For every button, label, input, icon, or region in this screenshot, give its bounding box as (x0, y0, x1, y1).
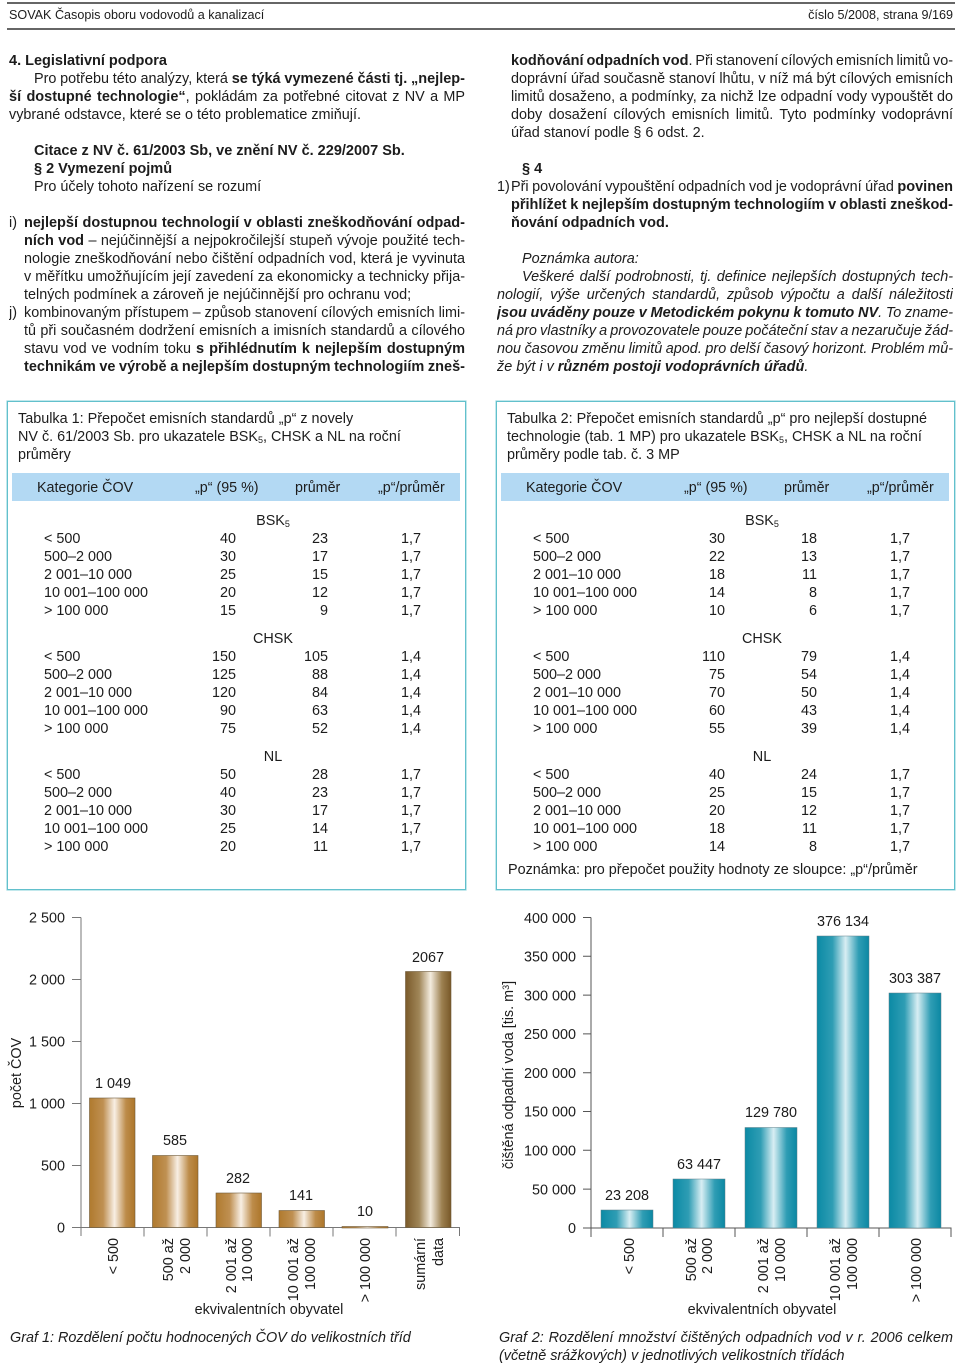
chart 2 y tick labels: 250 000 (524, 1027, 576, 1043)
table 1 header band: „p“/průměr (378, 480, 445, 496)
text column: left: v měřítku umožňujícím její zavedení za ekonomicky a technicky přija- (24, 269, 465, 285)
text column: left (9, 53, 465, 375)
text column: right: že být i v různém postoji vodoprávních úřadů. (497, 359, 808, 375)
table 1 data: 75 (220, 721, 236, 737)
chart 1 value labels: 282 (226, 1171, 250, 1187)
chart 2 category labels: > 100 000 (909, 1238, 925, 1302)
table 2 data: 60 (709, 703, 725, 719)
chart 2 category labels (622, 1238, 925, 1302)
table 2 data: 18 (801, 531, 817, 547)
chart 2 category labels: 2 000 (700, 1238, 716, 1274)
table 1 header band: „p“ (95 %) (195, 480, 259, 496)
text column: right: Poznámka autora: (522, 251, 639, 267)
chart 1 category labels: 10 000 (240, 1238, 256, 1282)
text column: left: tů při současném dodržení emisních a imisních standardů a cílového (24, 323, 465, 339)
table 1 data: 2 001–10 000 (44, 567, 132, 583)
text column: right: § 4 (522, 161, 542, 177)
chart 2 x axis title: ekvivalentních obyvatel (688, 1302, 836, 1318)
page header (7, 2, 955, 30)
text column: right: limitů dosaženo, a podmínky, za nichž lze odpadní vody vypouštět do (511, 89, 953, 105)
text column: right: přihlížet k nejlepším dostupným technologiím v oblasti zneškod- (511, 197, 953, 213)
table 1 data: 17 (312, 549, 328, 565)
table 1 data: 14 (312, 821, 328, 837)
table 2 data: 500–2 000 (533, 549, 601, 565)
table 1 data: 1,7 (401, 549, 421, 565)
table 2 data: 13 (801, 549, 817, 565)
table 2 data: 14 (709, 585, 725, 601)
chart 1 category labels (106, 1238, 447, 1302)
table 1 data: BSK5 (256, 513, 290, 529)
table 2 data: 110 (702, 649, 725, 665)
table 1 data: 10 001–100 000 (44, 703, 148, 719)
table 2 data: 1,7 (890, 603, 910, 619)
table 2 data: 1,7 (890, 785, 910, 801)
table 2 data: 10 (709, 603, 725, 619)
table 1 data (44, 513, 421, 855)
table 1 data: 2 001–10 000 (44, 685, 132, 701)
table 1 data: 1,4 (401, 649, 421, 665)
table 2 data: 20 (709, 803, 725, 819)
table 2 header band: „p“ (95 %) (684, 480, 748, 496)
table 1 data: 105 (304, 649, 328, 665)
text column: right: 1) (497, 179, 510, 195)
text column: left: telných podmínek a zároveň je nejúčinnější pro ochranu vod; (24, 287, 411, 303)
table 2 data: 11 (802, 567, 817, 583)
table 1 data: 500–2 000 (44, 785, 112, 801)
text column: left: Pro potřebu této analýzy, která se týká vymezené části tj. „nejlep- (34, 71, 465, 87)
table 2 data: > 100 000 (533, 839, 597, 855)
table 2 data: 500–2 000 (533, 785, 601, 801)
table 2 data: 1,7 (890, 839, 910, 855)
table 2 data: 50 (801, 685, 817, 701)
table 1 data: < 500 (44, 767, 80, 783)
chart 2 category labels: 100 000 (845, 1238, 861, 1290)
table 2 data: 2 001–10 000 (533, 803, 621, 819)
table 2 data: 18 (709, 821, 725, 837)
panel: table 2 (496, 401, 955, 890)
page header: číslo 5/2008, strana 9/169 (808, 8, 953, 22)
table 2 data: > 100 000 (533, 603, 597, 619)
table 2 data: 30 (709, 531, 725, 547)
chart 1 value labels: 141 (289, 1188, 313, 1204)
text column: right: doby dosažení cílových emisních limitů. Tyto podmínky vodoprávní (511, 107, 953, 123)
table 1 data: 30 (220, 549, 236, 565)
table 2 data: 1,4 (890, 667, 910, 683)
chart 1 category labels: 2 000 (178, 1238, 194, 1274)
chart 1 y tick labels: 2 500 (29, 910, 65, 926)
chart 2 y tick labels: 200 000 (524, 1066, 576, 1082)
table 1 data: 40 (220, 785, 236, 801)
chart 1: number of plants (8, 910, 460, 1318)
text column: right: nologií, výše určených standardů, způsob výpočtu a další náležitosti (497, 287, 953, 303)
text column: left: 4. Legislativní podpora (9, 53, 167, 69)
table 2 data: 15 (801, 785, 817, 801)
table 1 data: CHSK (253, 631, 293, 647)
table 2 data: 39 (801, 721, 817, 737)
table 2 data: 70 (709, 685, 725, 701)
chart 2 y axis title: čištěná odpadní voda [tis. m (501, 990, 517, 1169)
table 1 header band (12, 473, 460, 501)
table 1 data: > 100 000 (44, 721, 108, 737)
table 2 data: 18 (709, 567, 725, 583)
table 1 data: > 100 000 (44, 603, 108, 619)
table 1 data: 500–2 000 (44, 549, 112, 565)
text column: left: Citace z NV č. 61/2003 Sb, ve znění NV č. 229/2007 Sb. (34, 143, 405, 159)
chart 2 category labels: 10 000 (773, 1238, 789, 1282)
table 1 data: 17 (312, 803, 328, 819)
text column: right: jsou uváděny pouze v Metodickém pokynu k tomuto NV. To zname- (497, 305, 953, 321)
table 2 note: Poznámka: pro přepočet použity hodnoty ze sloupce: „p“/průměr (508, 862, 918, 878)
chart 1 y tick labels: 1 000 (29, 1096, 65, 1112)
table 2 data: < 500 (533, 767, 569, 783)
chart 2: treated wastewater (501, 911, 951, 1318)
table 1 data: 120 (212, 685, 236, 701)
table 1 data: 23 (312, 531, 328, 547)
chart 2 value labels (605, 914, 941, 1204)
chart 1 category labels: 500 až (161, 1238, 177, 1281)
chart 1 value labels (95, 950, 444, 1220)
table 2 data: 1,4 (890, 703, 910, 719)
table 1 data: 1,4 (401, 721, 421, 737)
chart 1 axes (72, 918, 460, 1236)
chart 2 bars (601, 936, 941, 1228)
chart 1 value labels: 1 049 (95, 1076, 131, 1092)
text column: left: i) (9, 215, 17, 231)
table 1 data: 1,4 (401, 667, 421, 683)
table 1 data: 23 (312, 785, 328, 801)
table 2 header band: průměr (784, 480, 829, 496)
chart 2 y tick labels: 100 000 (524, 1144, 576, 1160)
table 2 data: 1,7 (890, 567, 910, 583)
table 1 data: 9 (320, 603, 328, 619)
text column: left: Pro účely tohoto nařízení se rozumí (34, 179, 261, 195)
table 2 data: 12 (801, 803, 817, 819)
table 1 data: 15 (220, 603, 236, 619)
text column: left: § 2 Vymezení pojmů (34, 161, 172, 177)
table 1 data: 1,7 (401, 531, 421, 547)
table 1 header band: průměr (295, 480, 340, 496)
text column: left: nejlepší dostupnou technologií v oblasti zneškodňování odpad- (24, 215, 465, 231)
chart 1 y tick labels: 2 000 (29, 972, 65, 988)
table 2 data: CHSK (742, 631, 782, 647)
table 1 data: 84 (312, 685, 328, 701)
table 1 data: 1,7 (401, 839, 421, 855)
table 2 data: 2 001–10 000 (533, 685, 621, 701)
table 1 data: 28 (312, 767, 328, 783)
chart 1 x axis title: ekvivalentních obyvatel (195, 1302, 343, 1318)
table 2 data: 11 (802, 821, 817, 837)
table 2 data: 10 001–100 000 (533, 585, 637, 601)
chart 1 bars (90, 972, 451, 1228)
text column: left: ší dostupné technologie“, pokládám za potřebné citovat z NV a MP (9, 89, 465, 105)
table 2 header band: „p“/průměr (867, 480, 934, 496)
table 2 data: 6 (809, 603, 817, 619)
table 1 data: 25 (220, 821, 236, 837)
table 1 data: 63 (312, 703, 328, 719)
table 2 data: 8 (809, 585, 817, 601)
table 1 data: 20 (220, 585, 236, 601)
table 2 title (507, 411, 927, 463)
table 1 data: 20 (220, 839, 236, 855)
chart 1 category labels: < 500 (106, 1238, 122, 1274)
table 2 data: 1,7 (890, 767, 910, 783)
text column: right: nou časovou změnu limitů apod. pro delší časový horizont. Problém mů- (497, 341, 953, 357)
chart 1 category labels: sumární (413, 1238, 429, 1290)
text column: right (497, 53, 953, 375)
caption: graph 2: Graf 2: Rozdělení množství čištěných odpadních vod v r. 2006 celkem (499, 1330, 953, 1346)
chart 2 category labels: 500 až (684, 1238, 700, 1281)
table 2 data: 2 001–10 000 (533, 567, 621, 583)
table 1 data: 1,7 (401, 803, 421, 819)
table 1 data: 1,7 (401, 767, 421, 783)
table 1 data: 15 (312, 567, 328, 583)
table 2 data: < 500 (533, 531, 569, 547)
text column: left: stavu vod ve vodním toku s přihlédnutím k nejlepším dostupným (24, 341, 465, 357)
table 1 data: 1,7 (401, 567, 421, 583)
text column: right: doprávní úřad současně stanoví lhůtu, v níž má být cílových emisních (511, 71, 953, 87)
table 1 data: 1,4 (401, 703, 421, 719)
table 2 data: 1,7 (890, 821, 910, 837)
chart 2 y tick labels: 50 000 (532, 1182, 576, 1198)
table 2 data: 55 (709, 721, 725, 737)
table 2 data (533, 513, 910, 855)
table 1 data: 12 (312, 585, 328, 601)
table 2 data: 1,7 (890, 549, 910, 565)
table 1 data: 500–2 000 (44, 667, 112, 683)
table 2 data: 1,4 (890, 721, 910, 737)
table 2 data: 1,4 (890, 649, 910, 665)
chart 2 value labels: 63 447 (677, 1157, 721, 1173)
chart 2 y tick labels: 0 (568, 1221, 576, 1237)
table 2 data: < 500 (533, 649, 569, 665)
table 2 header band (501, 473, 949, 501)
chart 1 category labels: 2 001 až (224, 1238, 240, 1293)
table 2 data: 10 001–100 000 (533, 703, 637, 719)
chart 1 y tick labels: 500 (41, 1158, 65, 1174)
chart 2 value labels: 303 387 (889, 971, 941, 987)
table 2 data: 24 (801, 767, 817, 783)
text column: right: Při povolování vypouštění odpadních vod je vodoprávní úřad povinen (511, 179, 953, 195)
table 1 data: 1,7 (401, 785, 421, 801)
table 1 data: 1,4 (401, 685, 421, 701)
chart 1 value labels: 10 (357, 1204, 373, 1220)
chart 1 category labels: > 100 000 (358, 1238, 374, 1302)
text column: left: ních vod – nejúčinnější a nejpokročilejší stupeň vývoje použité tech- (24, 233, 465, 249)
chart 2 category labels: 10 001 až (828, 1238, 844, 1301)
table 2 data: 1,4 (890, 685, 910, 701)
chart 2 value labels: 23 208 (605, 1188, 649, 1204)
table 1 data: 2 001–10 000 (44, 803, 132, 819)
chart 2 y tick labels: 350 000 (524, 950, 576, 966)
table 1 data: 150 (212, 649, 236, 665)
table 1 data: 1,7 (401, 603, 421, 619)
table 2 data: NL (753, 749, 771, 765)
chart 1 y tick labels (29, 910, 65, 1236)
text column: left: technikám ve výrobě a nejlepším dostupným technologiím zneš- (24, 359, 465, 375)
caption: graph 2 (499, 1330, 953, 1364)
text column: right: ňování odpadních vod. (511, 215, 669, 231)
table 1 data: 90 (220, 703, 236, 719)
text column: left: vybrané odstavce, které se o této problematice zmiňují. (9, 107, 361, 123)
table 2 data: 43 (801, 703, 817, 719)
chart 1 category labels: data (431, 1238, 447, 1266)
table 2 data: 75 (709, 667, 725, 683)
text column: right: ná pro vlastníky a provozovatele pouze počáteční stav a nezaručuje žád- (497, 323, 953, 339)
table 2 data: 25 (709, 785, 725, 801)
chart 2 value labels: 376 134 (817, 914, 869, 930)
table 1 data: 30 (220, 803, 236, 819)
text column: right: Veškeré další podrobnosti, tj. definice nejlepších dostupných tech- (522, 269, 953, 285)
text column: left: nologie zneškodňování nebo čištění odpadních vod, která je vyvinuta (24, 251, 465, 267)
table 1 data: 125 (212, 667, 236, 683)
table 1 data: 10 001–100 000 (44, 821, 148, 837)
table 2 data: 1,7 (890, 803, 910, 819)
chart 2 y tick labels (524, 911, 576, 1237)
table 2 title: průměry podle tab. č. 3 MP (507, 447, 680, 463)
page header: SOVAK Časopis oboru vodovodů a kanalizací (9, 8, 264, 22)
table 2 data: 8 (809, 839, 817, 855)
table 2 data: 1,7 (890, 531, 910, 547)
panel: table 1 (7, 401, 466, 890)
table 1 data: 1,7 (401, 585, 421, 601)
table 1 data: 88 (312, 667, 328, 683)
table 1 title: průměry (18, 447, 71, 463)
table 2 data: 10 001–100 000 (533, 821, 637, 837)
caption: graph 2: (včetně srážkových) v jednotlivých velikostních třídách (499, 1348, 845, 1364)
text column: right: kodňování odpadních vod. Při stanovení cílových emisních limitů vo- (511, 53, 953, 69)
chart 2 axes (583, 918, 951, 1237)
table 1 data: 50 (220, 767, 236, 783)
table 2 title: technologie (tab. 1 MP) pro ukazatele BSK5, CHSK a NL na roční (507, 429, 922, 445)
table 1 data: > 100 000 (44, 839, 108, 855)
table 2 data: BSK5 (745, 513, 779, 529)
text column: right: úřad stanoví podle § 6 odst. 2. (511, 125, 705, 141)
table 2 data: 22 (709, 549, 725, 565)
table 2 data: 54 (801, 667, 817, 683)
table 1 title: Tabulka 1: Přepočet emisních standardů „p“ z novely (18, 411, 353, 427)
table 1 title (18, 411, 401, 463)
table 1 data: 52 (312, 721, 328, 737)
chart 1 category labels: 100 000 (303, 1238, 319, 1290)
table 1 data: 10 001–100 000 (44, 585, 148, 601)
table 1 data: 1,7 (401, 821, 421, 837)
chart 2 y tick labels: 300 000 (524, 988, 576, 1004)
table 2 data: 79 (801, 649, 817, 665)
chart 2 value labels: 129 780 (745, 1105, 797, 1121)
caption: graph 1: Graf 1: Rozdělení počtu hodnocených ČOV do velikostních tříd (10, 1330, 411, 1346)
table 1 data: NL (264, 749, 282, 765)
table 2 data: 40 (709, 767, 725, 783)
chart 1 value labels: 2067 (412, 950, 444, 966)
table 2 data: 500–2 000 (533, 667, 601, 683)
chart 2 category labels: < 500 (622, 1238, 638, 1274)
chart 1 y axis title: počet ČOV (8, 1037, 25, 1108)
table 2 header band: Kategorie ČOV (526, 480, 622, 496)
chart 2 y tick labels: 150 000 (524, 1104, 576, 1120)
chart 2 category labels: 2 001 až (756, 1238, 772, 1293)
table 2 data: 1,7 (890, 585, 910, 601)
table 1 data: 40 (220, 531, 236, 547)
chart 1 value labels: 585 (163, 1133, 187, 1149)
table 2 title: Tabulka 2: Přepočet emisních standardů „p“ pro nejlepší dostupné (507, 411, 927, 427)
table 1 data: 25 (220, 567, 236, 583)
chart 2 y axis title: ] (501, 981, 517, 985)
table 2 data: 14 (709, 839, 725, 855)
chart 2 y axis title: 3 (501, 985, 511, 990)
table 1 data: < 500 (44, 531, 80, 547)
chart 1 y tick labels: 1 500 (29, 1034, 65, 1050)
chart 2 y tick labels: 400 000 (524, 911, 576, 927)
table 2 data: > 100 000 (533, 721, 597, 737)
table 1 data: 11 (313, 839, 328, 855)
text column: left: kombinovaným přístupem – způsob stanovení cílových emisních limi- (24, 305, 465, 321)
table 1 data: < 500 (44, 649, 80, 665)
chart 1 category labels: 10 001 až (286, 1238, 302, 1301)
text column: left: j) (9, 305, 17, 321)
table 1 title: NV č. 61/2003 Sb. pro ukazatele BSK5, CHSK a NL na roční (18, 429, 401, 445)
table 1 header band: Kategorie ČOV (37, 480, 133, 496)
chart 1 y tick labels: 0 (57, 1220, 65, 1236)
